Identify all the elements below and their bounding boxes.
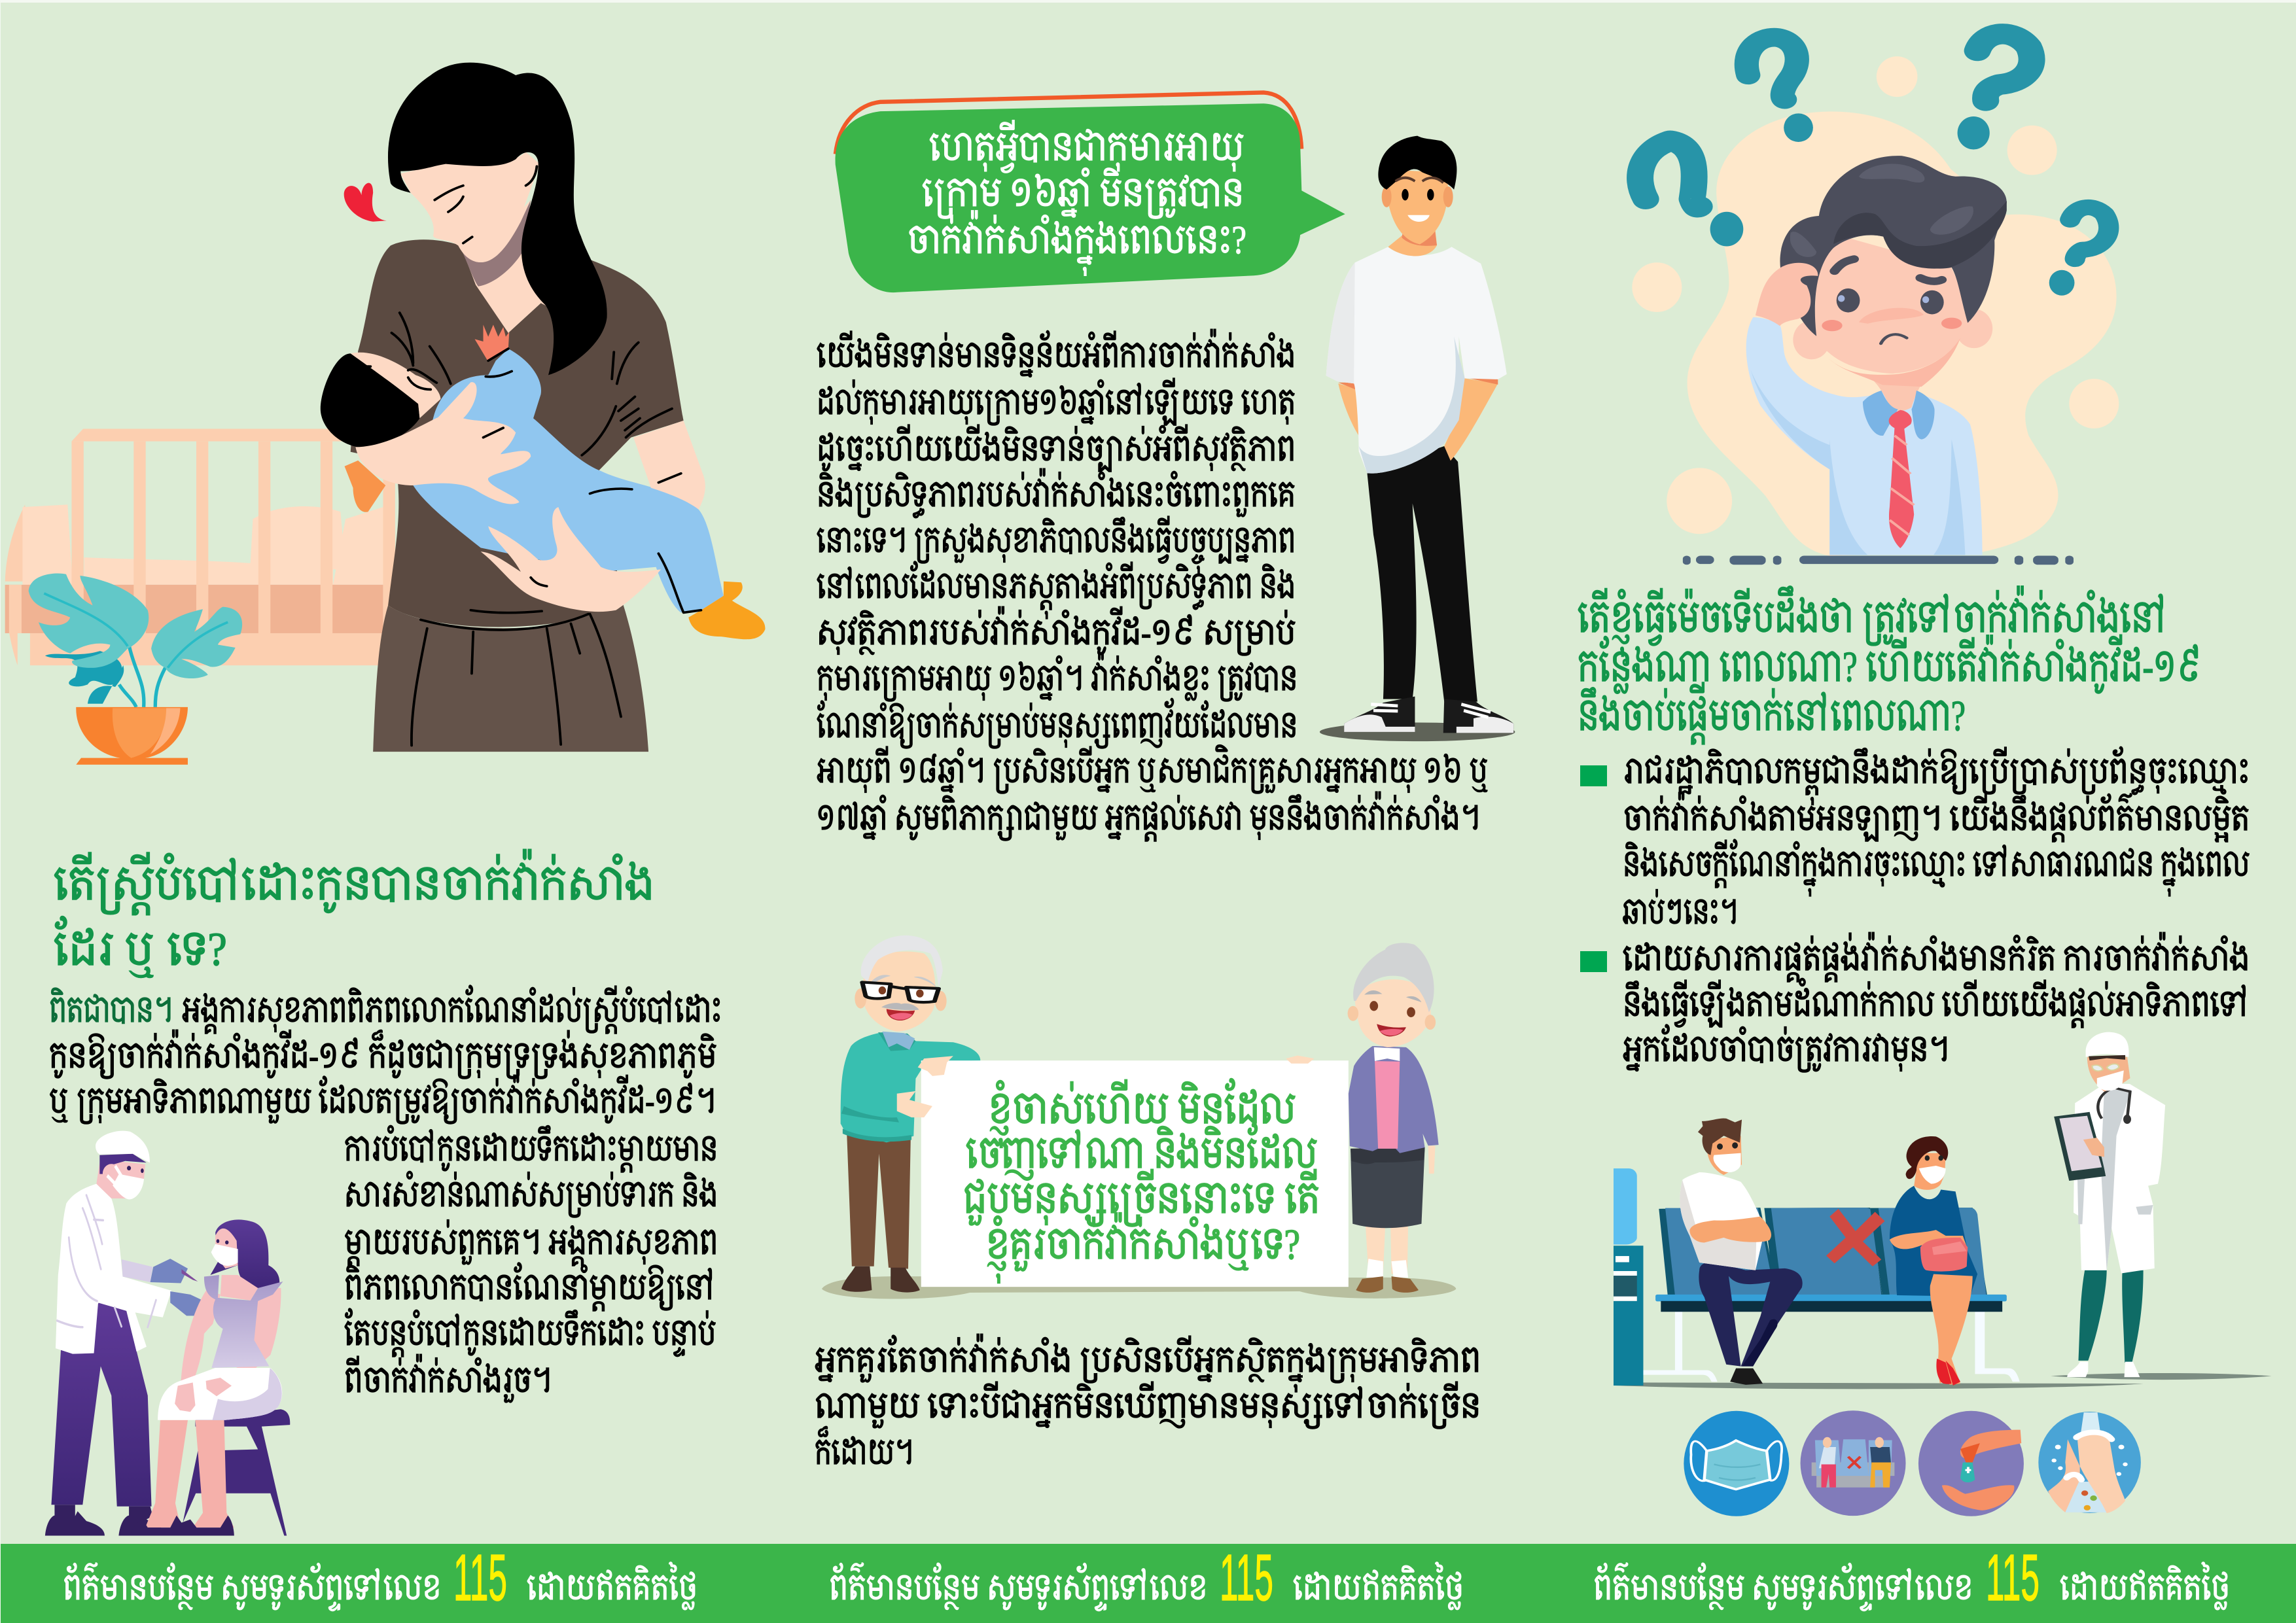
old man moustache and mouth <box>881 1003 919 1010</box>
middle lower body text: ក៏ដោយ។ <box>815 1427 914 1472</box>
illustration: waiting room with social distancing <box>1614 1032 2272 1389</box>
base dashes <box>1683 556 2074 565</box>
ground shadows <box>1614 1382 2144 1389</box>
footer hotline left: ដោយឥតគិតថ្លៃ <box>527 1562 698 1611</box>
woman arms and legs <box>175 1288 281 1412</box>
white sign board <box>921 1060 1349 1287</box>
neck <box>1388 222 1437 256</box>
right heading <box>1578 585 2202 744</box>
middle body text: អាយុពី ១៨ឆ្នាំ។ ប្រសិនបើអ្នក ឬសមាជិកគ្រួសារអ្នកអាយុ ១៦ ឬ <box>817 745 1489 794</box>
old woman jacket <box>1349 1046 1439 1153</box>
footer hotline left: ព័ត៌មានបន្ថែម សូមទូរស័ព្ទទៅលេខ <box>63 1563 441 1611</box>
bench seats <box>1655 1208 2007 1312</box>
standing doctor <box>2054 1032 2165 1377</box>
icon: hand washing <box>2038 1412 2141 1513</box>
trousers <box>1367 446 1477 702</box>
left body text <box>49 985 722 1403</box>
mother head and hair <box>388 63 607 375</box>
speech bubble question text: ក្រោម ១៦ឆ្នាំ មិនត្រូវបាន <box>922 167 1244 219</box>
hair <box>1780 156 2007 336</box>
head <box>1386 169 1448 244</box>
speech bubble question text: ហេតុអ្វីបានជាកុមារអាយុ <box>929 120 1244 173</box>
seated woman <box>1890 1136 1977 1386</box>
speech bubble <box>836 92 1345 292</box>
middle body text: ដូច្នេះហើយយើងមិនទាន់ច្បាស់អំពីសុវត្ថិភាព <box>817 425 1296 472</box>
shirt <box>1746 317 1983 555</box>
woman shoes <box>130 1516 234 1536</box>
middle body text: ១៧ឆ្នាំ សូមពិភាក្សាជាមួយ អ្នកផ្តល់សេវា មុននឹងចាក់វ៉ាក់សាំង។ <box>817 792 1481 842</box>
speech bubble question text: ចាក់វ៉ាក់សាំងក្នុងពេលនេះ? <box>907 211 1246 275</box>
red cross on empty seat <box>1826 1209 1884 1266</box>
middle body text <box>817 329 1489 842</box>
icon: red heart <box>344 183 387 222</box>
hand scratching head <box>1756 263 1818 326</box>
middle body text: យើងមិនទាន់មានទិន្នន័យអំពីការចាក់វ៉ាក់សាំង <box>817 329 1296 377</box>
middle body text: សុវត្ថិភាពរបស់វ៉ាក់សាំងកូវីដ-១៩ សម្រាប់ <box>817 606 1296 656</box>
arms <box>1338 378 1498 461</box>
old man shoes <box>841 1266 920 1293</box>
footer bar <box>1 1541 2296 1623</box>
illustration: doctor vaccinating a woman <box>45 1131 290 1536</box>
footer hotline centre: ព័ត៌មានបន្ថែម សូមទូរស័ព្ទទៅលេខ <box>829 1563 1207 1611</box>
footer hotline centre <box>829 1541 1464 1614</box>
old man sweater <box>841 1032 980 1142</box>
illustration: young man <box>1320 136 1515 741</box>
water cooler <box>1614 1168 1643 1386</box>
bullet list: អ្នកដែលចាំបាច់ត្រូវការវាមុន។ <box>1623 1024 1950 1073</box>
left body text: ពីចាក់វ៉ាក់សាំងរួច។ <box>344 1354 552 1403</box>
old man hands <box>897 1056 953 1117</box>
head and ears <box>1793 321 1830 359</box>
old woman legs <box>1366 1227 1408 1274</box>
doctor shoes <box>45 1505 175 1536</box>
bullet marker 2 <box>1580 951 1607 972</box>
old woman face <box>1364 990 1421 1002</box>
left body text: តែបន្តបំបៅកូនដោយទឹកដោះ បន្ទាប់ <box>344 1308 716 1357</box>
question mark dots <box>1710 113 2074 296</box>
old man glasses <box>862 982 939 1002</box>
sign text: ជួបមនុស្សច្រើននោះទេ តើ <box>963 1170 1320 1227</box>
left body text: ម្តាយរបស់ពួកគេ។ អង្គការសុខភាព <box>344 1220 718 1266</box>
speech bubble question text <box>907 120 1246 275</box>
left body text: ពិតជាបាន។ <box>49 988 173 1030</box>
icon row: prevention measures <box>1684 1410 2141 1516</box>
doctor coat <box>56 1184 171 1354</box>
footer hotline right: 115 <box>1986 1541 2040 1614</box>
sneakers <box>1344 697 1415 732</box>
left heading: តើស្ត្រីបំបៅដោះកូនបានចាក់វ៉ាក់សាំង <box>54 849 654 915</box>
footer hotline centre: 115 <box>1220 1541 1273 1614</box>
left body text: អង្គការសុខភាពពិភពលោកណែនាំដល់ស្ត្រីបំបៅដោះ <box>182 985 722 1034</box>
middle lower body text <box>815 1334 1481 1472</box>
collar <box>1863 391 1935 440</box>
old woman head <box>1355 979 1431 1047</box>
left body text: ឬ ក្រុមអាទិភាពណាមួយ ដែលតម្រូវឱ្យចាក់វ៉ាក់សាំងកូវីដ-១៩។ <box>49 1075 716 1125</box>
tie <box>1889 410 1914 548</box>
old man collar <box>882 1032 915 1050</box>
white t-shirt <box>1326 247 1507 474</box>
footer hotline left: 115 <box>453 1541 507 1614</box>
old woman shoes <box>1356 1276 1419 1293</box>
face details <box>1835 259 1942 281</box>
baby and mother's arms <box>321 324 765 639</box>
middle lower body text: អ្នកគួរតែចាក់វ៉ាក់សាំង ប្រសិនបើអ្នកស្ថិតក្នុងក្រុមអាទិភាព <box>815 1334 1481 1391</box>
left body text: ពិភពលោកបានណែនាំម្តាយឱ្យនៅ <box>344 1263 716 1312</box>
plant in orange pot <box>29 574 242 765</box>
middle body text: ដល់កុមារអាយុក្រោម១៦ឆ្នាំនៅឡើយទេ ហេតុ <box>817 379 1296 426</box>
footer hotline left <box>63 1541 698 1614</box>
icon: face mask <box>1684 1411 1789 1516</box>
bullet list <box>1580 746 2250 1073</box>
neck <box>1867 375 1926 411</box>
woman top <box>204 1275 283 1368</box>
shadows <box>822 1276 1456 1299</box>
woman skirt <box>158 1368 282 1420</box>
left body text: កូនឱ្យចាក់វ៉ាក់សាំងកូវីដ-១៩ ក៏ដូចជាក្រុមទ្រទ្រង់សុខភាពភូមិ <box>49 1030 716 1079</box>
woman hand <box>175 1378 232 1412</box>
woman hair behind <box>210 1219 279 1288</box>
icon: distanced seating <box>1801 1410 1906 1516</box>
left heading <box>54 849 654 978</box>
old woman hair <box>1353 943 1434 1012</box>
doctor head <box>96 1159 145 1198</box>
woman face and mask <box>215 1229 238 1268</box>
sign text: ខ្ញុំគួរចាក់វ៉ាក់សាំងឬទេ? <box>985 1212 1300 1283</box>
old woman skirt <box>1351 1147 1425 1228</box>
doctor trousers <box>51 1301 152 1507</box>
crib <box>5 429 396 665</box>
old man hair <box>861 935 943 987</box>
seated man <box>1680 1118 1803 1385</box>
mother dress <box>351 200 684 752</box>
footer hotline right: ដោយឥតគិតថ្លៃ <box>2060 1562 2230 1611</box>
illustration: confused man with question marks <box>1632 34 2119 565</box>
middle body text: នោះទេ។ ក្រសួងសុខាភិបាលនឹងធ្វើបច្ចុប្បន្នភាព <box>817 517 1296 574</box>
left heading: ដែរ ឬ ទេ? <box>54 916 227 978</box>
left body text: សារសំខាន់ណាស់សម្រាប់ទារក និង <box>344 1171 718 1218</box>
peach blob background <box>1687 111 2117 556</box>
old man head <box>862 952 936 1032</box>
bullet list: ឆាប់ៗនេះ។ <box>1623 890 1739 932</box>
left body text: ការបំបៅកូនដោយទឹកដោះម្តាយមាន <box>344 1125 718 1173</box>
icon: hand sanitizer <box>1918 1411 2024 1516</box>
old woman hands <box>1286 1056 1436 1174</box>
footer hotline right: ព័ត៌មានបន្ថែម សូមទូរស័ព្ទទៅលេខ <box>1593 1563 1973 1611</box>
middle body text: ណែនាំឱ្យចាក់សម្រាប់មនុស្សពេញវ័យដែលមាន <box>817 698 1298 749</box>
sign text: ចេញទៅណា និងមិនដែល <box>966 1123 1317 1181</box>
doctor sleeve and gloves <box>122 1259 152 1282</box>
sign text <box>963 1078 1320 1283</box>
sign text: ខ្ញុំចាស់ហើយ មិនដែល <box>988 1078 1296 1148</box>
ground shadow <box>1320 722 1515 741</box>
bullet marker 1 <box>1580 765 1607 786</box>
stool <box>183 1409 290 1536</box>
footer hotline centre: ដោយឥតគិតថ្លៃ <box>1293 1562 1464 1611</box>
footer hotline right <box>1593 1541 2230 1614</box>
middle lower body text: ណាមួយ ទោះបីជាអ្នកមិនឃើញមានមនុស្សទៅចាក់ច្រើន <box>815 1382 1481 1429</box>
bench legs <box>1643 1310 2020 1382</box>
middle body text: និងប្រសិទ្ធភាពរបស់វ៉ាក់សាំងនេះចំពោះពួកគេ <box>817 468 1296 518</box>
old man trousers <box>847 1134 911 1269</box>
illustration: elderly couple holding a sign <box>822 935 1456 1299</box>
right heading: នឹងចាប់ផ្តើមចាក់នៅពេលណា? <box>1578 683 1966 744</box>
line details <box>336 313 701 746</box>
question marks <box>1640 34 2109 259</box>
middle body text: នៅពេលដែលមានភស្តុតាងអំពីប្រសិទ្ធភាព និង <box>817 561 1296 619</box>
middle body text: កុមារក្រោមអាយុ ១៦ឆ្នាំ។ វ៉ាក់សាំងខ្លះ ត្រូវបាន <box>817 652 1298 702</box>
peach dots <box>1632 56 2119 534</box>
illustration: mother holding baby with crib and plant <box>5 63 765 765</box>
